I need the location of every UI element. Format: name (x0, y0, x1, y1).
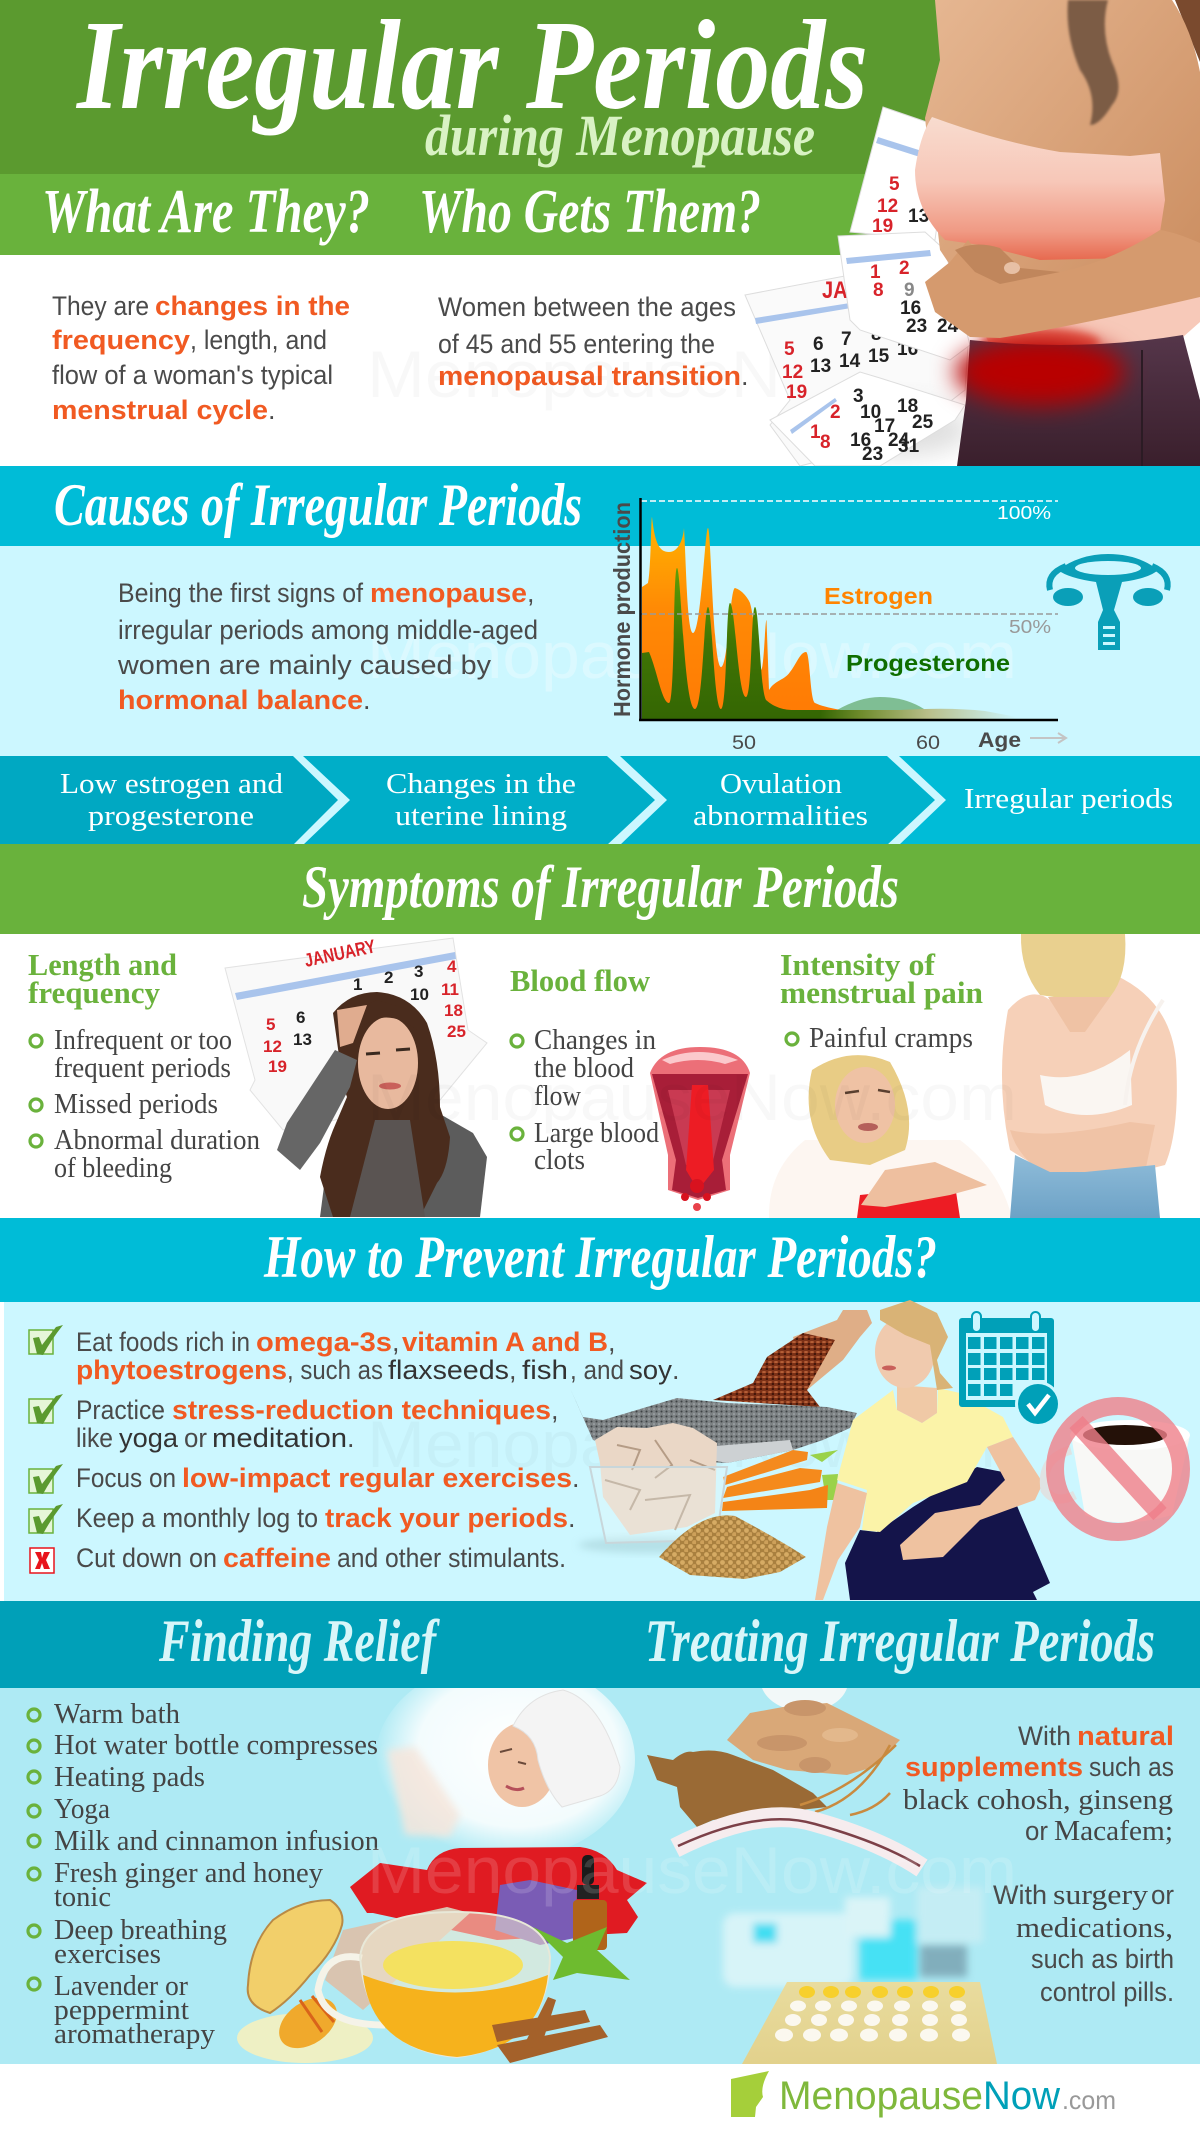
tea cup (360, 1912, 550, 2057)
text block: who gets them: menopausal transition (438, 361, 741, 391)
honey puddle (237, 2013, 373, 2063)
illustration: scattered calendars: 6 (813, 334, 824, 355)
chart: hormone production by age: 100% (997, 503, 1051, 523)
text block: what are they: , length, and (190, 325, 327, 355)
icon: uterus (1049, 554, 1168, 650)
illustration: woman holding abdomen (915, 0, 1200, 466)
text block: prevention tips: Cut down on (76, 1543, 217, 1573)
illustration: scattered calendars: 8 (820, 432, 831, 453)
cinnamon (492, 1997, 608, 2063)
illustration: scattered calendars: 13 (908, 206, 929, 227)
text block: length and frequency (28, 947, 260, 1184)
illustration: scattered calendars: 2 (899, 258, 910, 279)
illustration: scattered calendars: 16 (900, 298, 921, 319)
panel: symptoms header band (0, 844, 1200, 934)
text block: prevention tips (76, 1327, 680, 1573)
icon: logo mark (731, 2071, 769, 2117)
flow: causal chain arrows: progesterone (88, 800, 254, 832)
text block: causes: menopause (370, 578, 527, 608)
text block: prevention tips: Keep a monthly log to (76, 1503, 318, 1533)
illustration: scattered calendars: 10 (860, 402, 881, 423)
text block: treatments: surgery (1053, 1880, 1148, 1911)
text block: prevention tips: or (184, 1423, 207, 1453)
text block: prevention tips: caffeine (223, 1543, 331, 1573)
chart: hormone production by age (609, 498, 1066, 754)
illustration: foods (570, 1310, 872, 1579)
logo (731, 2071, 1116, 2118)
text block: prevention tips: , (608, 1327, 616, 1357)
text block: prevention tips: soy (629, 1355, 672, 1385)
progesterone hump (837, 697, 924, 720)
lavender (495, 1880, 577, 1945)
black cohosh (675, 1817, 922, 1868)
illustration: hot water bottle, tea, ginger, herbs (237, 1847, 647, 2063)
heading: what are they: What Are They? (42, 178, 370, 246)
text block: blood flow: Changes in (534, 1025, 656, 1056)
illustration: scattered calendars: 8 (873, 280, 884, 301)
carrots (810, 1450, 838, 1500)
chart: hormone production by age: 50% (1009, 617, 1051, 637)
text block: what are they (52, 291, 350, 425)
icon: check 4 (29, 1504, 63, 1534)
chart: hormone production by age: Hormone production (609, 502, 635, 717)
watermark: MenopauseNow.com (367, 337, 1017, 411)
text block: blood flow: clots (534, 1145, 585, 1176)
text block: finding relief list: Heating pads (54, 1762, 205, 1793)
text block: prevention tips: Eat foods rich in (76, 1327, 250, 1357)
logo: Menopause (779, 2074, 983, 2118)
text block: finding relief list: Yoga (54, 1794, 111, 1825)
supplement jar (762, 1688, 847, 1713)
text block: causes: . (363, 685, 371, 715)
watermark: MenopauseNow.com (367, 1833, 1017, 1907)
text block: finding relief list: exercises (54, 1939, 161, 1970)
red hot water bottle (350, 1847, 647, 1940)
text block: treatments: supplements (905, 1752, 1083, 1782)
text block: length and frequency: Length and (28, 947, 177, 982)
heading: who gets them: Who Gets Them? (419, 178, 761, 246)
flow: causal chain arrows: Irregular periods (964, 783, 1173, 815)
text block: prevention tips: phytoestrogens (76, 1355, 287, 1385)
text block: intensity of pain (780, 947, 983, 1054)
text block: finding relief list: Fresh ginger and honey (54, 1858, 323, 1889)
oil vial (582, 1855, 594, 1885)
icon: check 1 (29, 1325, 63, 1355)
text block: finding relief list: Deep breathing (54, 1915, 227, 1946)
illustration: uterus cross-section (650, 1047, 750, 1211)
illustration: scattered calendars: 14 (839, 351, 861, 372)
text block: prevention tips: Practice (76, 1395, 165, 1425)
illustration: calendar behind woman: 25 (447, 1022, 466, 1041)
text block: causes: , (527, 578, 535, 608)
illustration: scattered calendars: 23 (862, 444, 883, 465)
subtitle: during Menopause (425, 103, 815, 168)
illustration: scattered calendars: 13 (810, 356, 831, 377)
illustration: calendar behind woman: 6 (296, 1008, 305, 1027)
text block: treatments: medications, (1016, 1913, 1173, 1944)
illustration: calendar behind woman: 2 (384, 968, 393, 987)
text block: length and frequency: Abnormal duration (54, 1125, 260, 1156)
panel: header band (0, 0, 950, 255)
flaxseeds (713, 1333, 835, 1407)
text block: treatments: such as birth (1031, 1944, 1174, 1974)
text block: what are they: frequency (52, 325, 190, 355)
illustration: scattered calendars: 16 (850, 430, 871, 451)
illustration: calendar behind woman: 11 (441, 980, 459, 999)
illustration: seated woman (815, 1300, 1050, 1600)
illustration: scattered calendars: 12 (782, 362, 803, 383)
icon: calendar with check (959, 1312, 1061, 1427)
illustration: scattered calendars: 8 (871, 324, 882, 345)
fish (570, 1388, 857, 1463)
text block: finding relief list: tonic (54, 1882, 111, 1913)
illustration: woman in bath (380, 1688, 635, 1848)
text block: prevention tips: track your periods (325, 1503, 568, 1533)
illustration: scattered calendars: 25 (912, 412, 934, 433)
text block: treatments: black cohosh, ginseng (903, 1785, 1173, 1816)
estrogen area (642, 517, 870, 720)
panel: causes header band (0, 466, 1200, 546)
flow: causal chain arrows: uterine lining (395, 800, 567, 832)
text block: length and frequency: Missed periods (54, 1089, 218, 1120)
mint (533, 1927, 630, 1980)
illustration: scattered calendars: 5 (784, 339, 795, 360)
chart: hormone production by age: 60 (916, 733, 940, 754)
text block: length and frequency: frequency (28, 975, 160, 1010)
illustration: scattered calendars: 7 (841, 329, 852, 350)
text block: finding relief list (28, 1699, 379, 2050)
text block: finding relief list: Milk and cinnamon infusion (54, 1826, 379, 1857)
panel: prevention body (4, 1302, 1200, 1601)
heading: prevention: How to Prevent Irregular Periods? (263, 1224, 937, 1290)
wooden scoop (793, 1310, 872, 1390)
text block: intensity of pain: Intensity of (780, 947, 936, 982)
text block: prevention tips: . (672, 1355, 680, 1385)
text block: what are they: menstrual cycle (52, 395, 268, 425)
illustration: scattered calendars: 19 (872, 216, 893, 237)
text block: prevention tips: , (509, 1355, 517, 1385)
logo: Now (983, 2074, 1060, 2118)
illustration: scattered calendars: 23 (906, 316, 927, 337)
text block: prevention tips: Focus on (76, 1463, 176, 1493)
illustration: scattered calendars: 1 (810, 422, 821, 443)
text block: treatments: Macafem; (1054, 1816, 1173, 1847)
panel: causes body (0, 546, 1200, 757)
text block: blood flow: Blood flow (510, 963, 651, 998)
illustration: woman lying with hot water bottle (769, 1055, 1012, 1218)
fading tail (820, 709, 1017, 720)
illustration: calendar behind woman: 1 (353, 975, 362, 994)
text block: what are they: changes in the (155, 291, 350, 321)
text block: length and frequency: frequent periods (54, 1053, 231, 1084)
illustration: calendar behind woman: 18 (444, 1001, 463, 1020)
heading: symptoms: Symptoms of Irregular Periods (302, 854, 899, 920)
ginger root (325, 1907, 470, 2010)
illustration: calendar behind woman: 3 (414, 962, 423, 981)
text block: treatments: control pills. (1040, 1977, 1174, 2007)
illustration: calendar behind woman (225, 936, 487, 1130)
illustration: calendar behind woman: 19 (268, 1057, 287, 1076)
text block: prevention tips: flaxseeds (388, 1355, 509, 1385)
text block: intensity of pain: menstrual pain (780, 975, 983, 1010)
illustration: scattered calendars: 1 (870, 262, 881, 283)
text block: causes (117, 578, 538, 715)
illustration: scattered calendars: 17 (874, 416, 895, 437)
illustration: scattered calendars: 24 (937, 316, 959, 337)
watermark: MenopauseNow.com (367, 1407, 1017, 1481)
glass shadow (578, 1537, 722, 1553)
flow: causal chain arrows: Low estrogen and (60, 768, 284, 800)
text block: causes: irregular periods among middle-aged (118, 615, 538, 645)
text block: what are they: They are (52, 291, 149, 321)
illustration: calendar behind woman: 4 (447, 957, 457, 976)
illustration: stressed woman (277, 992, 487, 1217)
illustration: scattered calendars: 19 (786, 382, 807, 403)
text block: prevention tips: , (551, 1395, 559, 1425)
tea cup handle (318, 1957, 385, 2025)
flow: causal chain arrows: Changes in the (386, 768, 576, 800)
text block: finding relief list: Lavender or (54, 1971, 189, 2002)
text block: prevention tips: . (572, 1463, 580, 1493)
chart: hormone production by age: 50 (732, 733, 756, 754)
illustration: scattered calendars: 5 (889, 174, 900, 195)
text block: who gets them (438, 292, 749, 391)
watermark: MenopauseNow.com (367, 1060, 1017, 1134)
heading: causes: Causes of Irregular Periods (54, 472, 582, 538)
illustration: scattered calendars: 24 (888, 430, 910, 451)
progesterone area (642, 568, 850, 720)
soybeans (659, 1515, 806, 1579)
text block: treatments: or (1151, 1880, 1174, 1910)
chart: hormone production by age: Estrogen (824, 583, 933, 609)
chart: hormone production by age: Progesterone (846, 650, 1010, 676)
text block: what are they: . (268, 395, 276, 425)
illustration: scattered calendars: 31 (898, 436, 920, 457)
text block: treatments: With (1018, 1721, 1071, 1751)
text block: prevention tips: . (347, 1423, 355, 1453)
illustration: blurred medical scene (723, 1887, 983, 1987)
illustration: scattered calendars: 9 (904, 280, 915, 301)
text block: finding relief list: aromatherapy (54, 2019, 215, 2050)
text block: treatments: such as (1089, 1752, 1174, 1782)
illustration: scattered calendars: 16 (897, 339, 918, 360)
illustration: calendar behind woman: 13 (293, 1030, 312, 1049)
tofu in glass (595, 1423, 717, 1535)
ginseng (647, 1751, 827, 1827)
text block: prevention tips: and other stimulants. (337, 1543, 566, 1573)
text block: who gets them: of 45 and 55 entering the (438, 329, 715, 359)
text block: treatments: natural (1077, 1721, 1174, 1751)
text block: prevention tips: yoga (119, 1423, 179, 1453)
text block: prevention tips: like (76, 1423, 113, 1453)
honey dipper (270, 1987, 346, 2059)
illustration: calendar behind woman: JANUARY (303, 936, 378, 972)
text block: prevention tips: , (392, 1327, 400, 1357)
flow: causal chain arrows: abnormalities (693, 800, 868, 832)
text block: prevention tips: stress-reduction techniques (172, 1395, 551, 1425)
text block: prevention tips: meditation (212, 1423, 347, 1453)
text block: blood flow: the blood (534, 1053, 634, 1084)
panel: relief and treatment body (0, 1688, 1200, 2064)
illustration: scattered calendars: 15 (868, 346, 890, 367)
text block: finding relief list: Warm bath (54, 1699, 180, 1730)
illustration: scattered calendars: 12 (877, 196, 898, 217)
text block: length and frequency: Infrequent or too (54, 1025, 232, 1056)
text block: prevention tips: fish (522, 1355, 568, 1385)
flow: causal chain arrows (0, 756, 1200, 845)
text block: prevention tips: , and (570, 1355, 624, 1385)
illustration: scattered calendars: 2 (830, 402, 841, 423)
text block: what are they: flow of a woman's typical (52, 360, 333, 390)
illustration: standing woman in pain (1002, 934, 1177, 1218)
panel: prevention header band (0, 1218, 1200, 1302)
logo: .com (1062, 2085, 1116, 2115)
text block: prevention tips: , such as (287, 1355, 383, 1385)
text block: finding relief list: Hot water bottle compresses (54, 1730, 378, 1761)
icon: cross (30, 1548, 54, 1573)
illustration: calendar behind woman: 12 (263, 1037, 282, 1056)
text block: blood flow: flow (534, 1081, 582, 1112)
tablets (727, 1703, 900, 1775)
ginger slice (248, 1900, 342, 2013)
text block: intensity of pain: Painful cramps (809, 1023, 973, 1054)
heading: finding relief: Finding Relief (158, 1608, 440, 1674)
flow: causal chain arrows: Ovulation (720, 768, 843, 800)
panel: relief and treatment header band (0, 1601, 1200, 1688)
icon: no coffee (1044, 1406, 1190, 1532)
text block: finding relief list: peppermint (54, 1995, 189, 2026)
icon: check 3 (29, 1464, 63, 1494)
text block: causes: Being the first signs of (118, 578, 363, 608)
icon: check 2 (29, 1394, 63, 1424)
text block: length and frequency: of bleeding (54, 1153, 172, 1184)
illustration: scattered calendars (745, 107, 970, 466)
text block: prevention tips: low-impact regular exercises (182, 1463, 572, 1493)
text block: prevention tips: . (568, 1503, 576, 1533)
illustration: calendar behind woman: 5 (266, 1015, 275, 1034)
text block: who gets them: . (741, 361, 749, 391)
text block: causes: women are mainly caused by (117, 650, 492, 680)
illustration: scattered calendars: JAN (822, 277, 862, 304)
text block: treatments (903, 1721, 1174, 2007)
text block: who gets them: Women between the ages (438, 292, 736, 322)
text block: blood flow: Large blood (534, 1118, 659, 1149)
illustration: scattered calendars: 3 (853, 386, 864, 407)
illustration: scattered calendars: 18 (897, 396, 918, 417)
chart: hormone production by age: Age (978, 729, 1021, 752)
text block: prevention tips: omega-3s (256, 1327, 392, 1357)
watermark: MenopauseNow.com (367, 618, 1017, 692)
text block: treatments: or (1025, 1816, 1048, 1846)
text block: prevention tips: vitamin A and B (402, 1327, 608, 1357)
text block: treatments: With (993, 1880, 1047, 1910)
illustration: herbal supplements (647, 1688, 922, 1868)
illustration: calendar behind woman: 10 (410, 985, 429, 1004)
text block: causes: hormonal balance (118, 685, 363, 715)
illustration: birth control pill pack (742, 1982, 997, 2064)
text block: blood flow (510, 963, 659, 1176)
